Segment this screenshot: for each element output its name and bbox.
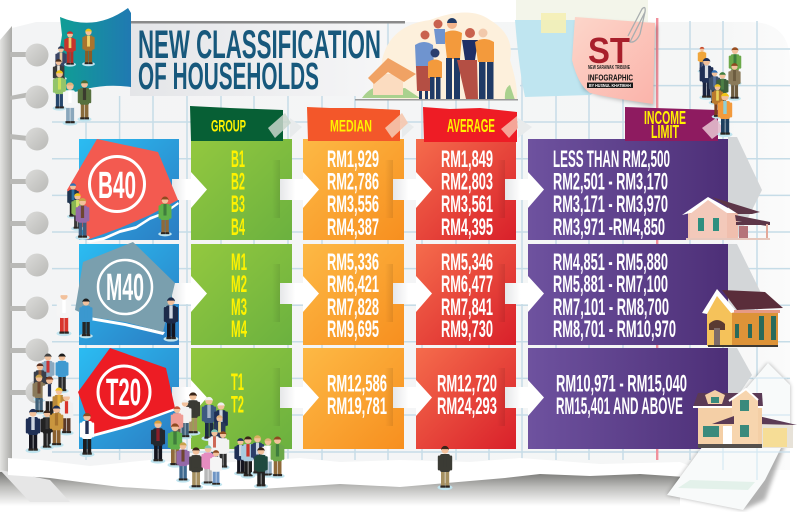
header: INCOME LIMIT: INCOME	[644, 107, 686, 128]
grid lines	[52, 21, 790, 460]
text: M1	[231, 249, 247, 276]
sticky note: pink with logo	[572, 17, 657, 107]
people: M40 badge	[56, 292, 178, 342]
group labels: T1	[231, 369, 244, 396]
header: MEDIAN	[307, 107, 414, 141]
income limit values: RM8,701 - RM10,970	[553, 316, 676, 343]
income limit values: RM3,971 -RM4,850	[553, 214, 665, 241]
badge: T20	[78, 348, 176, 437]
people: B40 badge	[67, 183, 172, 240]
header: AVERAGE	[423, 107, 532, 142]
average values: RM4,395	[441, 214, 493, 241]
sticky note: blue	[515, 0, 648, 97]
median values: RM6,421	[327, 271, 379, 298]
average values	[437, 146, 497, 420]
income limit values: RM3,171 - RM3,970	[553, 191, 668, 218]
punch holes with tabs	[10, 44, 48, 404]
text: M2	[231, 271, 247, 298]
average values: RM2,803	[441, 168, 493, 196]
header: INCOME LIMIT: LIMIT	[651, 121, 679, 142]
title text: OF HOUSEHOLDS	[138, 56, 319, 98]
logo: ST: ST	[588, 30, 630, 71]
people: centre crowd by T20	[151, 392, 230, 490]
income limit values: LESS THAN RM2,500	[553, 146, 670, 173]
median values: RM2,786	[327, 168, 379, 196]
average values: RM7,841	[441, 294, 493, 321]
median values	[327, 146, 387, 420]
logo: ST: INFOGRAPHIC	[588, 74, 633, 82]
average values: RM1,849	[441, 146, 493, 173]
logo: ST	[587, 30, 633, 88]
badge: T20: T20	[106, 372, 141, 414]
header: INCOME LIMIT	[625, 107, 724, 142]
icon: paperclip	[628, 8, 645, 42]
header: AVERAGE: AVERAGE	[447, 115, 495, 136]
average values: RM12,720	[437, 370, 497, 398]
income limit values: RM10,971 - RM15,040	[556, 370, 687, 398]
median values: RM12,586	[327, 370, 387, 398]
median values: RM4,387	[327, 214, 379, 241]
title banner	[130, 21, 405, 96]
text: M3	[231, 294, 247, 321]
group labels	[231, 146, 247, 418]
title text: NEW CLASSIFICATION	[138, 23, 381, 67]
logo: ST: NEW SARAWAK TRIBUNE	[588, 65, 630, 71]
median values: RM5,336	[327, 249, 379, 276]
income limit values: RM5,881 - RM7,100	[553, 271, 668, 298]
icon: pink bungalow	[682, 197, 770, 240]
people: top-right group	[698, 47, 742, 137]
median values: RM3,556	[327, 191, 379, 218]
average values: RM24,293	[437, 393, 497, 420]
icon: yellow house	[702, 289, 783, 347]
ribbon flag	[58, 8, 131, 97]
group labels: B3	[231, 191, 245, 218]
income limit values: RM7,101 - RM8,700	[553, 294, 669, 321]
people: left crowd by T20	[26, 354, 94, 457]
text: M4	[231, 316, 247, 343]
income limit values: RM2,501 - RM3,170	[553, 168, 668, 196]
arrows between columns	[172, 172, 544, 416]
badge: M40	[75, 242, 175, 335]
header: GROUP: GROUP	[211, 116, 246, 136]
illustration: family and house	[355, 12, 518, 100]
group labels: B4	[231, 214, 245, 241]
torn bottom edge of the paper	[0, 458, 700, 506]
median values: RM7,828	[327, 294, 379, 321]
badge: B40	[67, 139, 179, 243]
average values: RM6,477	[441, 271, 493, 298]
income limit values: RM4,851 - RM5,880	[553, 249, 668, 276]
badge: B40: B40	[98, 165, 136, 207]
icon: large two-storey house	[693, 389, 797, 448]
people: top-left group on the flag	[53, 29, 95, 126]
margin line	[656, 18, 658, 460]
income limit values	[553, 146, 687, 420]
badge: M40: M40	[106, 267, 144, 309]
group labels: T2	[231, 392, 244, 418]
header: GROUP	[190, 106, 302, 141]
average values: RM3,561	[441, 191, 493, 218]
folded corner of the paper	[667, 363, 790, 510]
logo: ST: BY HUSNUL KHATIMAH	[589, 83, 631, 88]
median values: RM9,695	[327, 316, 379, 343]
row panels	[79, 139, 728, 449]
median values: RM1,929	[327, 146, 379, 173]
family figures	[415, 18, 494, 99]
people: right crowd by T20	[234, 435, 285, 489]
group labels: B2	[231, 168, 245, 196]
group labels: B1	[231, 146, 245, 173]
title text	[138, 23, 381, 98]
shadows right of the income panels	[728, 137, 762, 410]
average values: RM9,730	[441, 316, 493, 343]
average values: RM5,346	[441, 249, 493, 276]
median values: RM19,781	[327, 393, 387, 420]
header: MEDIAN: MEDIAN	[330, 116, 372, 136]
person on torn paper	[438, 446, 452, 490]
